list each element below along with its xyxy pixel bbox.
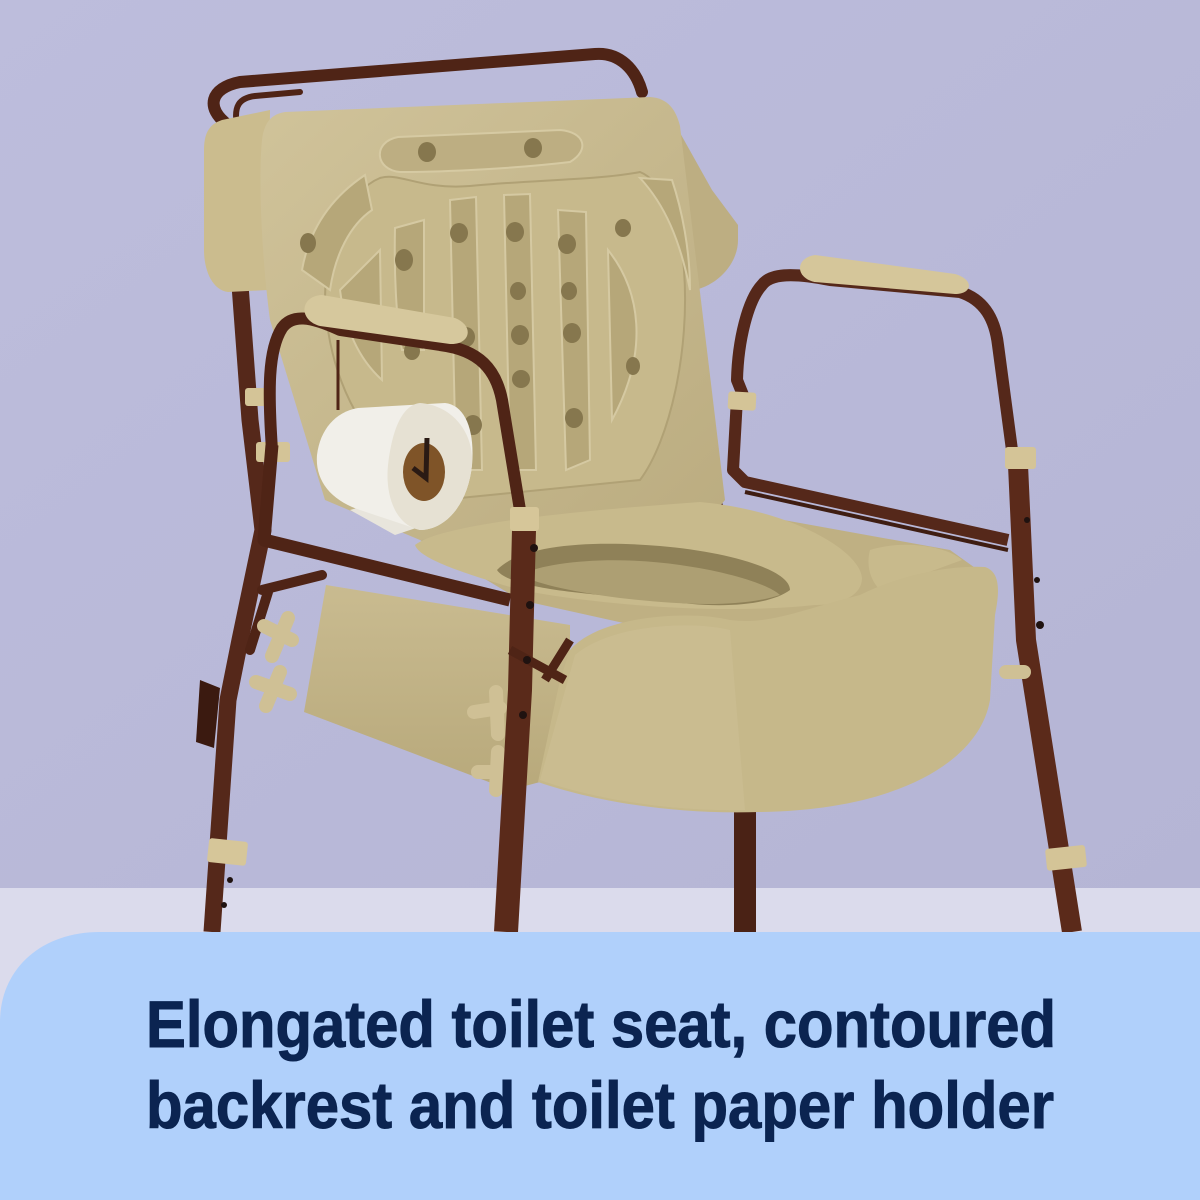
rear frame and back handle [212,54,745,932]
paper holder hook [413,438,427,478]
waste bin front panel [304,585,570,790]
rear frame clamp [196,680,220,748]
caption banner [0,932,1200,1200]
near frame bands and bolts [207,507,539,866]
near armrest frame [264,318,570,932]
toilet paper roll [317,403,473,535]
far armrest frame [733,275,1072,932]
floor [0,888,1200,1048]
wing nuts [256,618,1024,790]
backrest holes [300,138,640,435]
backrest ventilation slots [302,175,690,470]
wall background [0,0,1200,890]
backrest panel [260,97,725,540]
shroud highlight [540,625,745,810]
seat base [420,505,985,640]
caption line 2: backrest and toilet paper holder [146,1068,1054,1142]
side seat pad [868,545,962,590]
backrest wings [204,110,270,292]
far frame bands [245,388,1087,871]
roll core [403,443,445,501]
front seat shroud [538,567,998,812]
backrest contour ring [325,172,685,500]
near armrest pad [304,295,468,344]
toilet seat [415,502,862,609]
backrest top grip [380,130,582,172]
far armrest pad [800,255,969,294]
commode chair [196,54,1087,932]
seat opening [497,544,790,605]
caption line 1: Elongated toilet seat, contoured [146,987,1056,1061]
